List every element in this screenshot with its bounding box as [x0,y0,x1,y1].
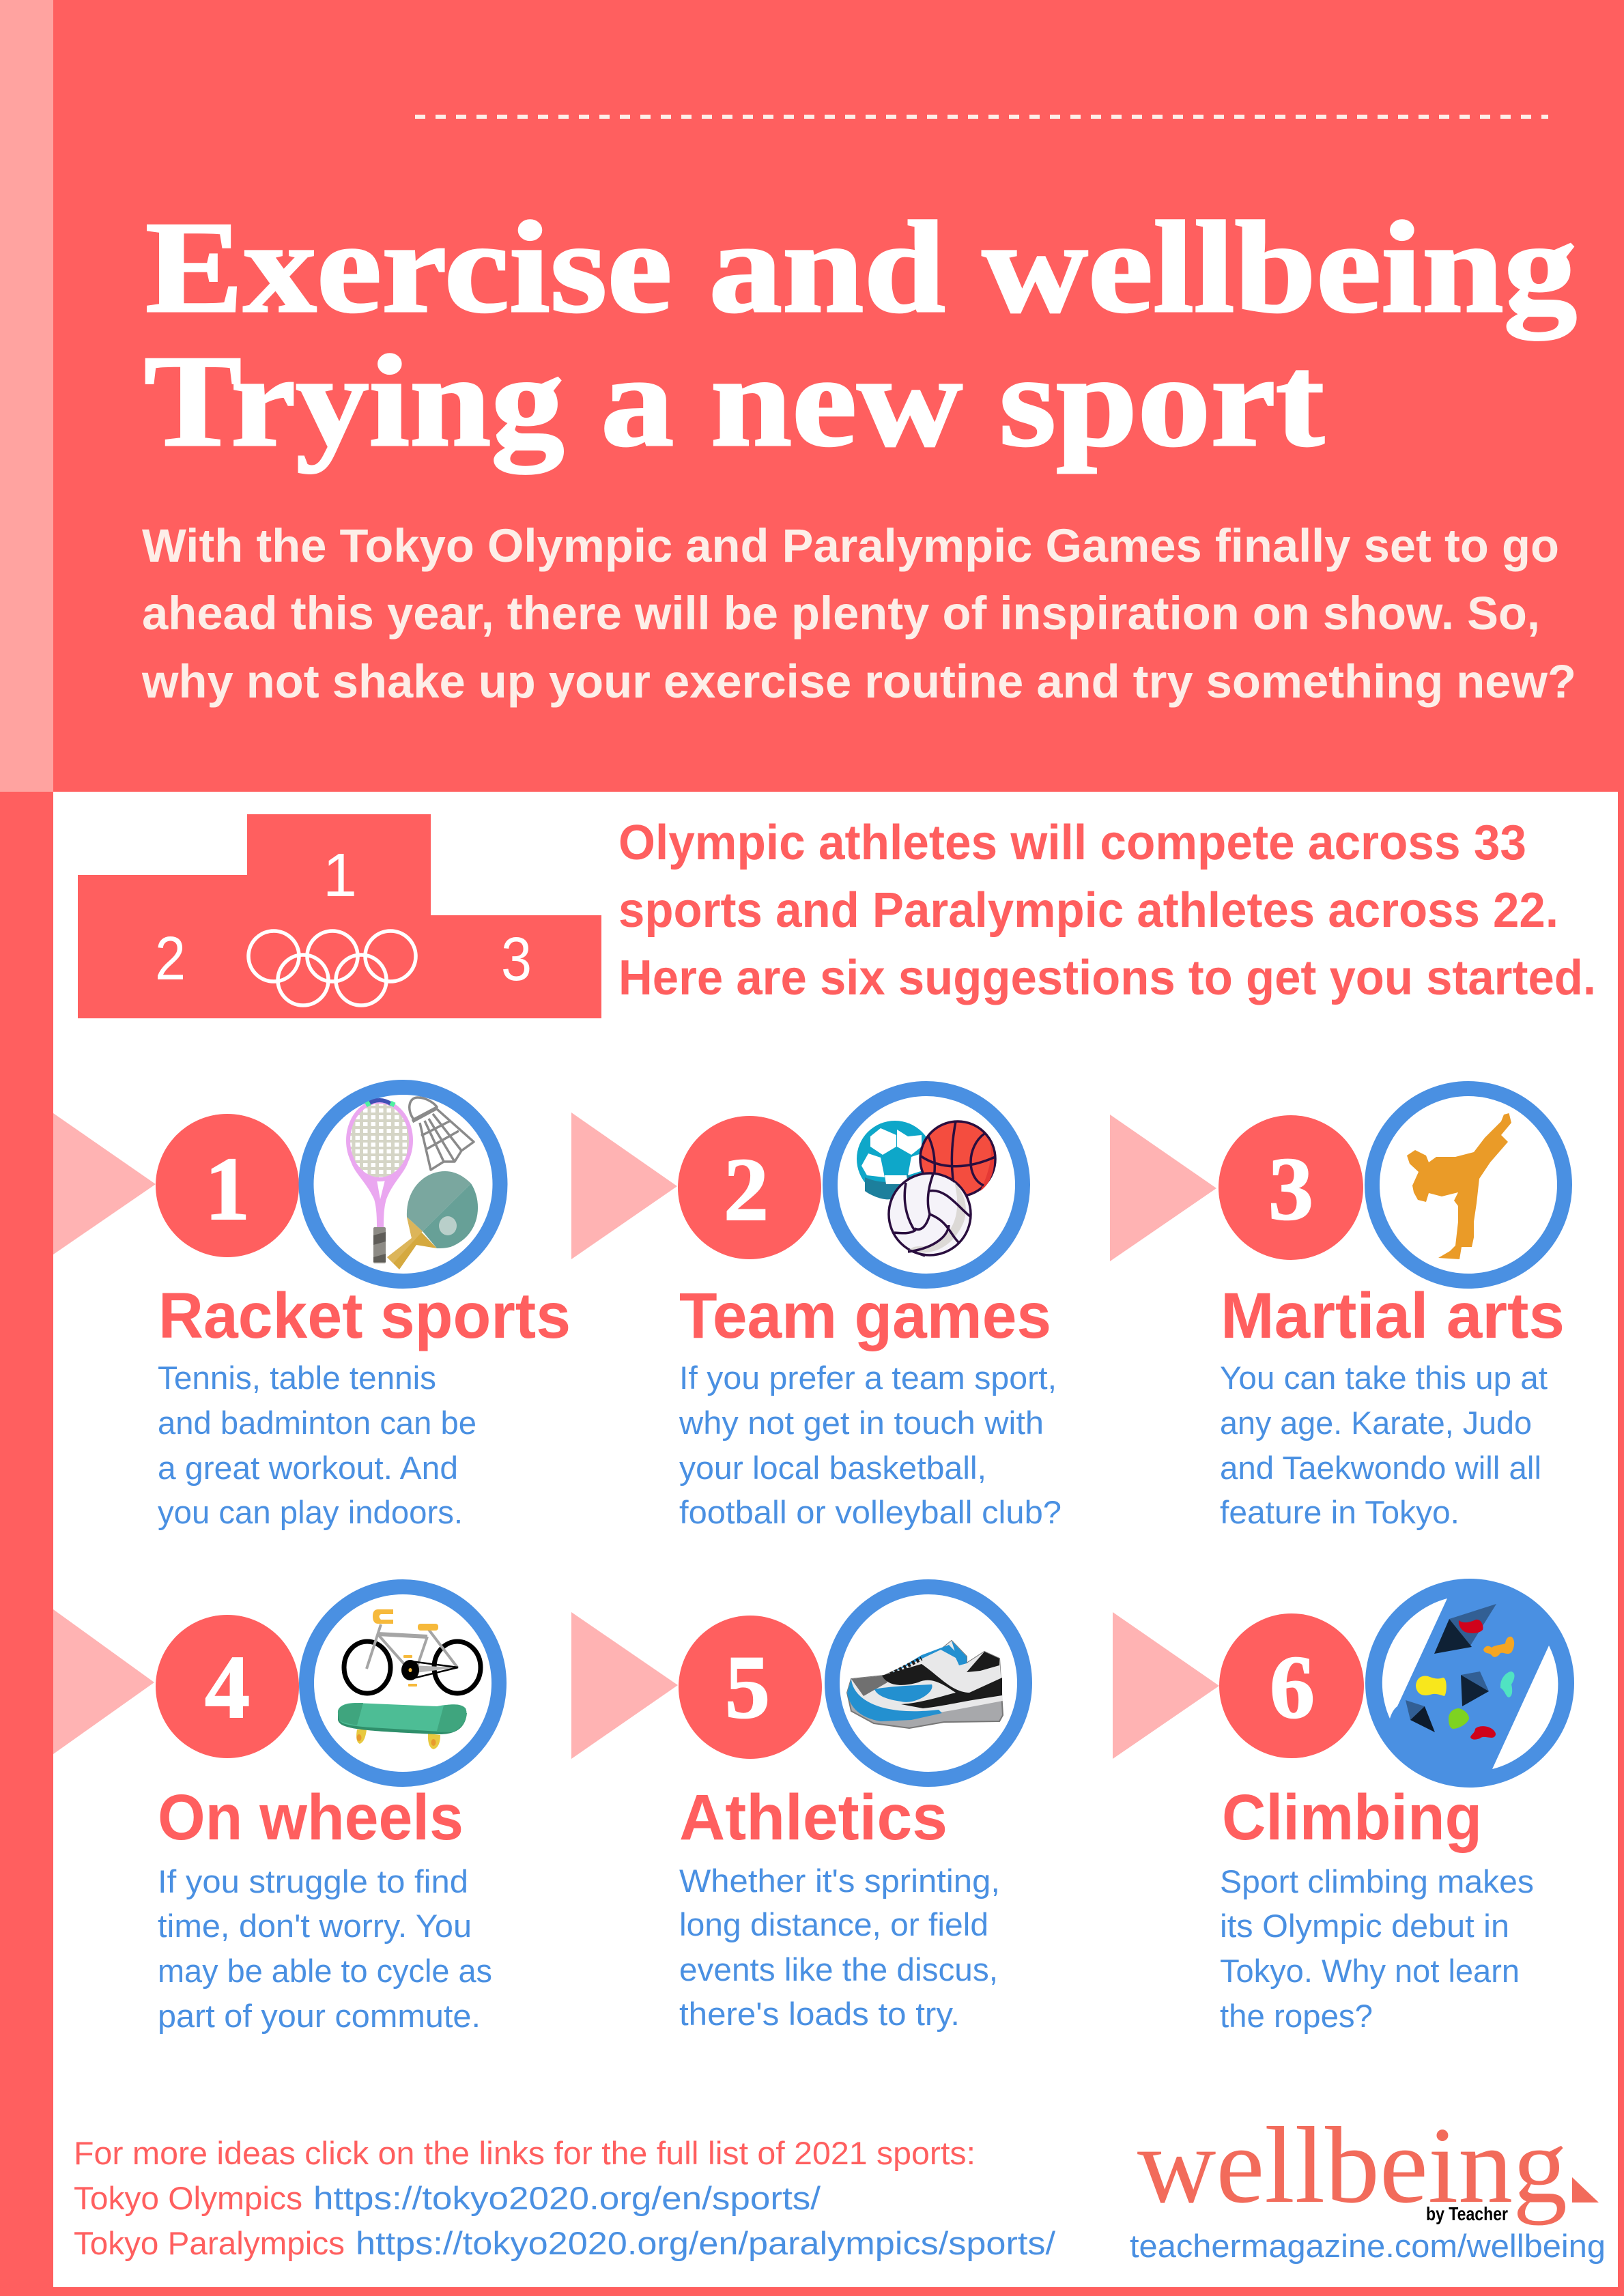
footer links: For more ideas click on the links for the full list of 2021 sports: [74,2135,975,2171]
number badge: 3 [1268,1138,1313,1239]
dashed rule [415,115,1548,119]
item 2: team games [571,1089,1062,1530]
icon: running shoe [832,1587,1025,1779]
description: any age. Karate, Judo [1220,1405,1532,1441]
number badge: 5 [725,1637,770,1737]
heading: Climbing [1222,1781,1482,1854]
description [1220,1863,1534,2034]
description: Whether it's sprinting, [679,1863,1000,1899]
title: Exercise and wellbeing [145,195,1577,341]
icon: martial artist [1372,1089,1565,1281]
heading: Racket sports [158,1280,571,1352]
lead text [618,816,1596,1005]
logo triangle [1572,2177,1599,2202]
description: If you prefer a team sport, [679,1360,1057,1396]
soccer ball [857,1121,933,1199]
item 5: athletics [571,1587,1025,2032]
description [679,1863,1000,2032]
description: football or volleyball club? [679,1494,1062,1530]
number badge: 6 [1270,1637,1315,1737]
description: If you struggle to find [158,1863,468,1899]
heading: Martial arts [1221,1280,1565,1352]
logo: wellbeing by Teacher: wellbeing [1137,2104,1567,2226]
number badge [1219,1613,1364,1758]
light side strip [0,0,53,792]
heading: Athletics [679,1781,948,1854]
arrow [1110,1115,1216,1261]
header panel [0,0,1624,792]
arrow [1113,1612,1219,1759]
description: long distance, or field [679,1906,988,1942]
volleyball [889,1173,971,1256]
lead text: Here are six suggestions to get you started. [618,951,1596,1005]
description: part of your commute. [158,1998,481,2034]
description: time, don't worry. You [158,1908,472,1944]
olympic rings [248,931,416,1005]
icon: rackets and shuttlecock [306,1087,500,1281]
footer links: Tokyo Paralympics [74,2225,345,2261]
number badge [1219,1115,1363,1260]
icon: climbing wall [1365,1579,1574,1788]
arrow [571,1113,677,1259]
description: your local basketball, [679,1450,986,1486]
item 6: climbing [1113,1579,1574,2034]
intro text: why not shake up your exercise routine and try something new? [141,655,1576,708]
podium [78,814,601,1018]
number badge [156,1615,299,1758]
description: why not get in touch with [679,1405,1044,1441]
lead text: sports and Paralympic athletes across 22. [618,883,1558,938]
footer links [74,2135,1056,2261]
description [1220,1360,1548,1530]
description: and badminton can be [158,1405,476,1441]
arrow [571,1612,678,1759]
description: events like the discus, [679,1951,998,1988]
description: may be able to cycle as [158,1953,492,1989]
icon: balls [830,1089,1023,1281]
arrow [53,1113,156,1254]
bicycle [344,1609,481,1693]
heading: On wheels [158,1781,464,1854]
item 4: on wheels [53,1587,499,2034]
item 3: martial arts [1110,1089,1565,1530]
number badge: 1 [205,1138,250,1239]
description [158,1863,492,2034]
description: Tennis, table tennis [158,1360,436,1396]
number badge [679,1616,822,1759]
description: feature in Tokyo. [1220,1494,1459,1530]
number badge [156,1114,299,1257]
description: there's loads to try. [679,1996,960,2032]
skateboard [338,1703,467,1749]
description [158,1360,476,1530]
footer links: https://tokyo2020.org/en/paralympics/sports/ [356,2225,1056,2261]
heading: Team games [679,1280,1051,1352]
number badge: 4 [205,1637,250,1737]
intro text: ahead this year, there will be plenty of inspiration on show. So, [142,587,1540,640]
basketball [920,1121,995,1196]
description: You can take this up at [1220,1360,1548,1396]
by Teacher: by Teacher [1426,2203,1508,2224]
icon: bike and skateboard [307,1587,499,1779]
footer links: Tokyo Olympics [74,2180,302,2216]
shuttlecock [410,1097,474,1170]
number badge [678,1116,821,1259]
number badge: 2 [724,1139,769,1239]
item 1: racket sports [53,1087,571,1530]
intro text [141,519,1576,708]
description: the ropes? [1220,1998,1373,2034]
footer links: https://tokyo2020.org/en/sports/ [313,2180,821,2216]
tennis racket [348,1100,411,1263]
description: Tokyo. Why not learn [1220,1953,1520,1989]
title [144,195,1577,474]
arrow [53,1609,154,1754]
table tennis paddle [387,1171,478,1269]
description: a great workout. And [158,1450,458,1486]
podium number 3: 3 [501,925,532,994]
title: Trying a new sport [144,328,1324,474]
lead text: Olympic athletes will compete across 33 [618,816,1526,870]
description [679,1360,1062,1530]
description: you can play indoors. [158,1494,463,1530]
podium number 2: 2 [155,925,186,993]
website link: teachermagazine.com/wellbeing [1130,2228,1606,2264]
intro text: With the Tokyo Olympic and Paralympic Games finally set to go [142,519,1559,572]
description: Sport climbing makes [1220,1863,1534,1899]
podium number 1: 1 [323,842,357,910]
description: its Olympic debut in [1220,1908,1509,1944]
description: and Taekwondo will all [1220,1450,1541,1486]
